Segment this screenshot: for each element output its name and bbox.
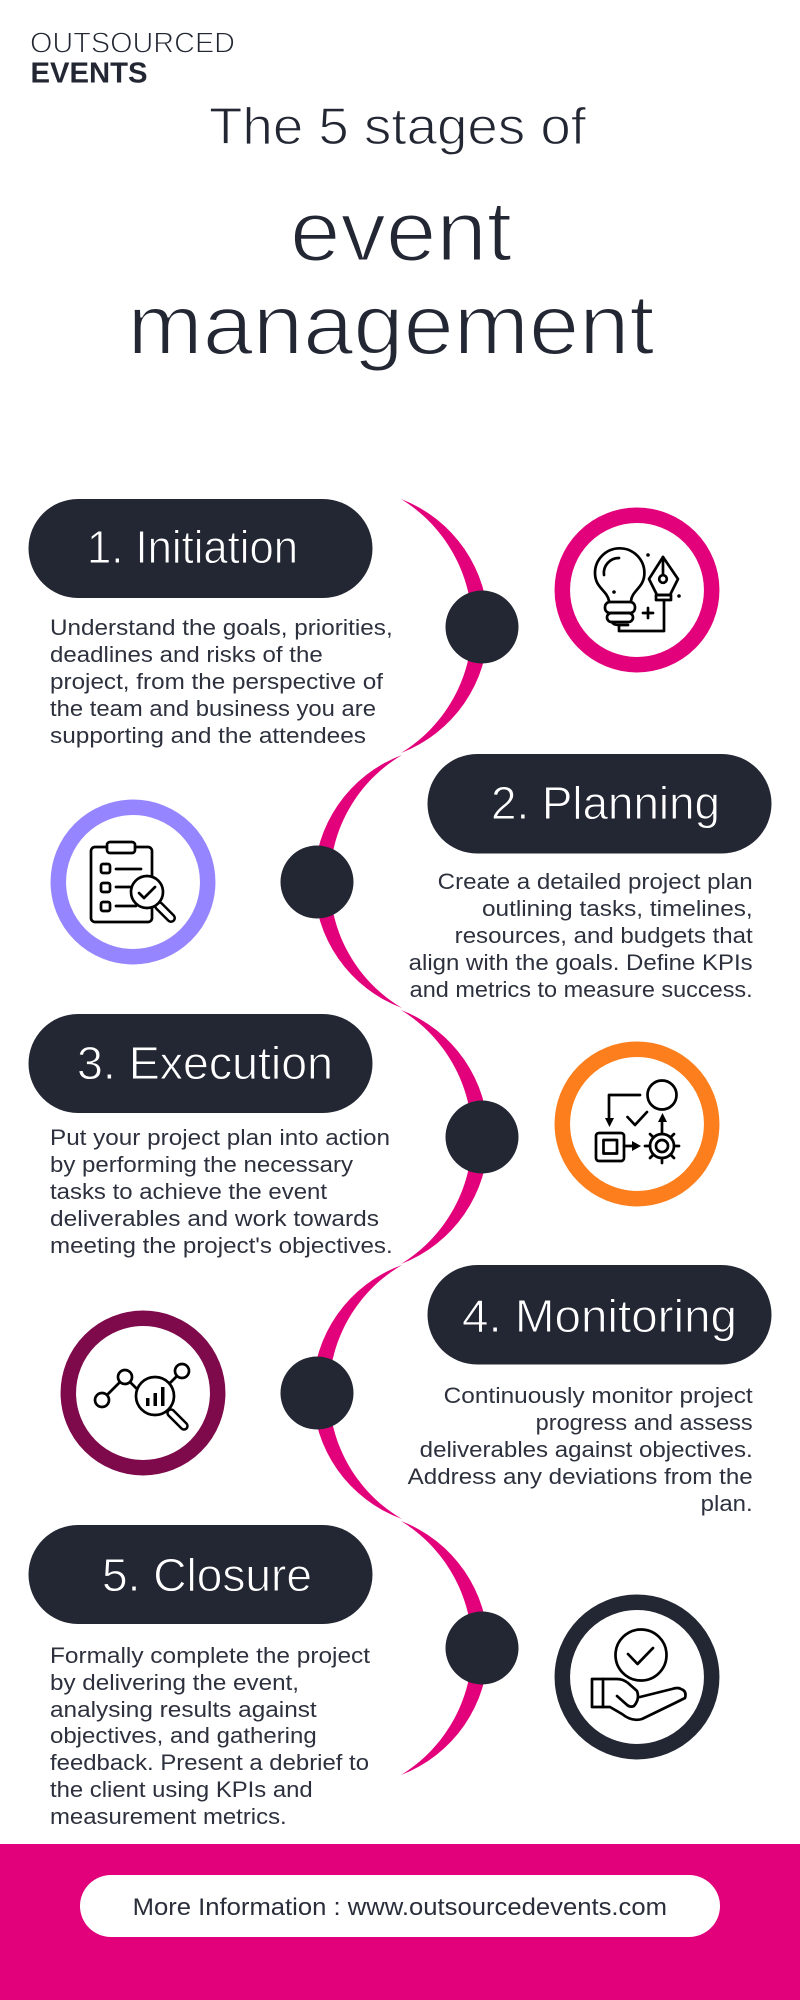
panel: 1 initiation — [28, 499, 712, 748]
heading: 5. Closure — [28, 1525, 372, 1624]
heading: 3. Execution — [28, 1014, 372, 1113]
footer link pill: More Information : www.outsourcedevents.com — [133, 1894, 667, 1921]
text: monitoring description: deliverables against objectives. — [420, 1437, 753, 1462]
text: closure description: analysing results against — [50, 1697, 317, 1722]
title: management — [128, 278, 654, 373]
text: execution description: Put your project plan into action — [50, 1125, 390, 1150]
heading: 4. Monitoring: 4. Monitoring — [462, 1290, 737, 1342]
footer link pill — [80, 1875, 720, 1937]
heading: 2. Planning — [428, 754, 772, 854]
text: planning description: align with the goals. Define KPIs — [409, 950, 753, 975]
panel: 4 monitoring — [68, 1265, 772, 1516]
icon: data analysis magnifier — [68, 1318, 218, 1468]
icon: clipboard checklist with magnifier — [58, 807, 208, 957]
text: execution description: deliverables and work towards — [50, 1206, 379, 1231]
text: planning description: and metrics to measure success. — [410, 977, 753, 1002]
heading: 1. Initiation — [28, 499, 372, 598]
text: monitoring description: progress and assess — [536, 1410, 753, 1435]
panel: 5 closure — [28, 1525, 712, 1829]
text: planning description: resources, and budgets that — [455, 923, 753, 948]
icon: hand holding check mark — [562, 1602, 712, 1752]
text: initiation description: deadlines and risks of the — [50, 642, 323, 667]
text: planning description: Create a detailed project plan — [438, 869, 753, 894]
icon: light bulb and pen — [562, 515, 712, 665]
heading: 5. Closure: 5. Closure — [102, 1549, 312, 1601]
text: closure description — [50, 1643, 370, 1829]
text: monitoring description — [408, 1383, 753, 1516]
text: execution description: tasks to achieve the event — [50, 1179, 327, 1204]
logo — [30, 28, 235, 90]
title — [128, 98, 654, 373]
title: The 5 stages of — [209, 98, 587, 156]
text: execution description: by performing the necessary — [50, 1152, 353, 1177]
text: planning description — [409, 869, 753, 1002]
footer band — [0, 1844, 800, 2000]
title: event — [290, 185, 512, 280]
heading: 4. Monitoring — [428, 1265, 772, 1364]
heading: 3. Execution: 3. Execution — [77, 1037, 333, 1089]
text: closure description: objectives, and gathering — [50, 1723, 317, 1748]
text: closure description: Formally complete the project — [50, 1643, 370, 1668]
text: initiation description — [50, 615, 393, 748]
text: initiation description: Understand the goals, priorities, — [50, 615, 393, 640]
panel: 2 planning — [58, 754, 772, 1002]
text: closure description: measurement metrics. — [50, 1804, 287, 1829]
winding timeline curve — [313, 499, 488, 1775]
text: closure description: feedback. Present a debrief to — [50, 1750, 369, 1775]
text: monitoring description: plan. — [701, 1491, 753, 1516]
text: initiation description: project, from the perspective of — [50, 669, 384, 694]
text: planning description: outlining tasks, timelines, — [482, 896, 753, 921]
text: monitoring description: Continuously monitor project — [444, 1383, 753, 1408]
logo: EVENTS — [30, 58, 148, 90]
text: initiation description: supporting and the attendees — [50, 723, 366, 748]
timeline dots — [280, 590, 518, 1684]
text: initiation description: the team and business you are — [50, 696, 376, 721]
text: closure description: the client using KPIs and — [50, 1777, 313, 1802]
logo: OUTSOURCED — [30, 28, 235, 60]
text: execution description: meeting the project's objectives. — [50, 1233, 393, 1258]
heading: 1. Initiation: 1. Initiation — [87, 521, 298, 573]
icon: process flow with gear — [562, 1049, 712, 1199]
panel: 3 execution — [28, 1014, 712, 1258]
text: monitoring description: Address any deviations from the — [408, 1464, 753, 1489]
text: execution description — [50, 1125, 393, 1258]
text: closure description: by delivering the event, — [50, 1670, 299, 1695]
heading: 2. Planning: 2. Planning — [491, 777, 720, 829]
